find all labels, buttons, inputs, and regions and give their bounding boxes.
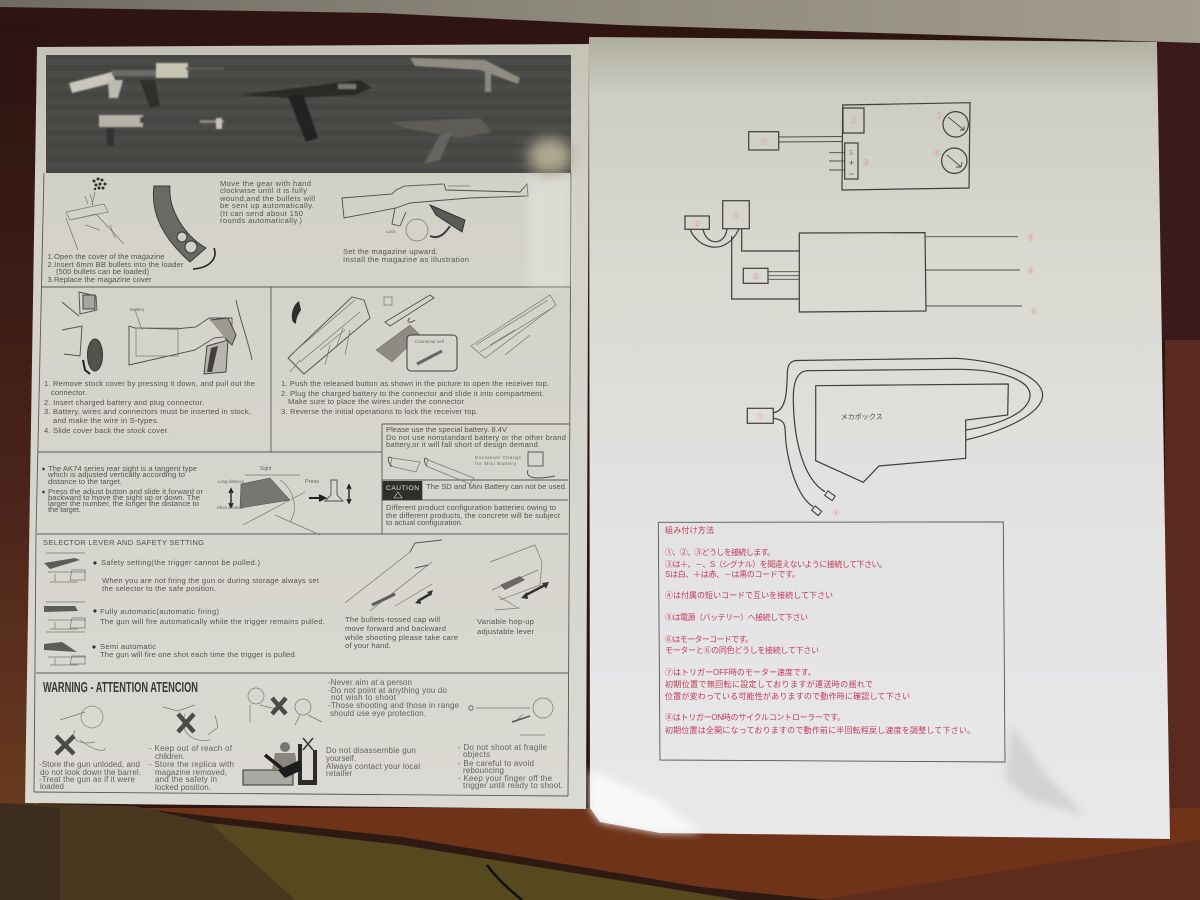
- panel: battery notice: [382, 425, 567, 527]
- diagram: wiring to motor: ⑤: [732, 212, 740, 220]
- panel: magazine loading: [48, 178, 528, 284]
- diagram: controller board: ③: [862, 159, 870, 167]
- text: sight instructions: distance to the target.: [48, 477, 122, 486]
- text: never aim: [328, 678, 460, 718]
- text: hop-up lever: adjustable lever: [477, 627, 534, 636]
- diagram: wiring to motor: ⑥: [1030, 308, 1038, 316]
- diagram: controller board: S: [849, 150, 854, 157]
- caution label: CAUTION: [386, 485, 419, 492]
- panel: stock battery: [44, 292, 255, 435]
- text: charger caption: [475, 455, 521, 467]
- panel: warning: [39, 678, 563, 792]
- text: sight instructions: larger the number, the longer the distance to: [48, 499, 199, 508]
- text: magazine steps: [48, 252, 184, 284]
- text: sight instructions: [42, 464, 203, 514]
- text: do not disassemble: yourself.: [326, 754, 356, 763]
- text: cap warning: of your hand.: [345, 641, 391, 650]
- diagram: wiring to motor: ③: [752, 273, 760, 281]
- panel frame lines: [34, 173, 571, 796]
- text: cap warning: [344, 615, 458, 650]
- diagram: wiring to motor: ⑥: [1028, 267, 1034, 275]
- text: caution message: The SD and Mini Battery can not be used.: [426, 482, 567, 491]
- text: item 6: [665, 635, 819, 655]
- heading: assembly method: 組み付け方法: [665, 525, 714, 535]
- diagram: controller board: ①: [760, 138, 767, 146]
- text: never aim: not wish to shoot: [331, 693, 397, 702]
- text: never aim: -Never aim at a person: [328, 678, 412, 687]
- text: safety setting: [93, 558, 320, 593]
- text: item 4: ④は付属の短いコードで互いを接続して下さい: [665, 590, 833, 600]
- text: keep out of reach: children.: [155, 752, 185, 761]
- diagram: controller board: ②: [850, 117, 857, 125]
- text: sight instructions: backward to move the sight up or down. The: [48, 493, 200, 502]
- panel: assembly instructions: [658, 522, 1005, 762]
- icon: person aiming at fragile object: [469, 698, 553, 735]
- text: receiver steps: [281, 379, 549, 416]
- text: safety setting: When you are not firing the gun or during storage always set: [102, 576, 320, 585]
- text: store unloaded: loaded: [40, 782, 64, 791]
- text: keep out of reach: - Keep out of reach of: [149, 744, 233, 753]
- text: magazine steps: 3.Replace the magazine cover: [48, 275, 152, 284]
- illustration: bullets-tossed cap: [345, 540, 442, 611]
- text: gear instruction: clockwise until it is fully: [220, 186, 307, 195]
- text: fully automatic: The gun will fire automatically while the trigger remains pulled.: [100, 617, 325, 626]
- diagram: controller board: +: [849, 158, 854, 168]
- illustration: rear sight: Short distance: [217, 505, 244, 510]
- text: item 8: ⑧はトリガーON時のサイクルコントローラーです。: [665, 712, 845, 722]
- text: sight instructions: The AK74 series rear sight is a tangent type: [48, 464, 197, 473]
- text: charger caption: Exclusive Charge: [475, 455, 521, 461]
- text: keep out of reach: magazine removed,: [155, 768, 227, 777]
- text: do not disassemble: Do not disassemble gun: [326, 746, 416, 755]
- text: battery steps: 2. Insert charged battery and plug connector.: [44, 398, 204, 407]
- illustration: battery in stock: [62, 292, 252, 374]
- text: battery steps: 4. Slide cover back the stock cover.: [44, 426, 169, 435]
- icon: child with replica: [163, 705, 218, 741]
- text: magazine steps: 2.Insert 6mm BB bullets into the loader: [48, 260, 184, 269]
- illustration: rifle with magazine: Lock: [386, 229, 396, 234]
- text: keep out of reach: locked position.: [155, 783, 211, 792]
- text: battery steps: 3. Battery, wires and connectors must be inserted in stock,: [44, 407, 251, 416]
- diagram: controller board: ⑧: [934, 149, 940, 157]
- text: fragile objects: - Do not shoot at fragile: [458, 743, 548, 752]
- text: cap warning: while shooting please take care: [344, 633, 458, 642]
- icon: two figures, do not aim: [248, 688, 322, 725]
- text: receiver steps: 1. Push the released button as shown in the picture to open the receiver top.: [281, 379, 549, 388]
- diagram: wiring to motor: ②: [694, 220, 700, 228]
- text: cap warning: move forward and backward: [345, 624, 446, 633]
- text: battery steps: connector.: [51, 388, 87, 397]
- panel: left sheet, gun manual: [25, 44, 589, 809]
- text: battery warning: battery,or it will fall short of design demand.: [386, 440, 540, 449]
- text: do not disassemble: retailer: [326, 769, 352, 778]
- text: fully automatic: [93, 607, 325, 626]
- text: magazine steps: 1.Open the cover of the magazine: [48, 252, 164, 261]
- caution label: [382, 481, 422, 500]
- text: item 6: モーターと⑥の同色どうしを接続して下さい: [665, 645, 819, 655]
- text: safety setting: the selector to the safe position.: [102, 584, 216, 593]
- illustration: rear sight: Press: [305, 479, 319, 485]
- text: item 7: ⑦はトリガーOFF時のモーター速度です。: [665, 667, 816, 677]
- text: item 7: 位置が変わっている可能性がありますので動作時に確認して下さい: [665, 691, 910, 701]
- text: gear instruction: Move the gear with hand: [220, 179, 311, 188]
- illustration: rear sight: Long distance: [218, 479, 245, 484]
- icon: do not disassemble: [243, 738, 317, 785]
- icon: safety position: [44, 553, 86, 582]
- text: magazine installation: Set the magazine upward.: [343, 247, 438, 256]
- illustration: rear sight: [217, 466, 351, 535]
- heading: warning: WARNING - ATTENTION ATENCION: [43, 679, 198, 696]
- text: semi automatic: The gun will fire one shot each time the trigger is pulled.: [100, 650, 297, 659]
- text: connector instructions: [665, 547, 887, 579]
- panel: rear sight: [42, 464, 351, 535]
- glare on left sheet: [528, 138, 572, 286]
- icons: batteries and charger: [388, 452, 555, 484]
- diagram: mechbox wire routing: ①: [756, 413, 764, 421]
- text: store unloaded: do not look down the barrel.: [40, 768, 141, 777]
- text: connector instructions: Sは白、＋は赤、－は黒のコードです。: [665, 569, 800, 579]
- panel: right sheet, wiring diagrams: [589, 37, 1170, 839]
- text: sight instructions: the target.: [48, 505, 81, 514]
- text: sight instructions: Press the adjust button and slide it forward or: [48, 487, 203, 496]
- text: item 8: [665, 712, 975, 735]
- text: semi automatic: Semi automatic: [100, 642, 156, 651]
- callout: connector detail: Connector cell: [415, 339, 444, 344]
- diagram: controller board: [749, 103, 970, 190]
- diagram: mechbox wire routing: ④: [832, 509, 840, 517]
- text: hop-up lever: [477, 617, 534, 636]
- text: semi automatic: [92, 642, 297, 659]
- panel: receiver battery: [281, 295, 556, 416]
- text: battery warning: Do not use nonstandard battery or the other brand: [386, 433, 566, 442]
- text: connector instructions: ①、②、③どうしを接続します。: [665, 547, 775, 557]
- text: keep out of reach: - Store the replica with: [149, 760, 234, 769]
- diagram: controller board: −: [849, 169, 854, 179]
- text: fragile objects: [458, 743, 563, 790]
- icon: semi auto position: [44, 632, 86, 665]
- illustration: rifle with magazine: [342, 184, 528, 241]
- text: item 6: ⑥はモーターコードです。: [665, 635, 753, 644]
- illustration: battery in stock: Battery: [130, 307, 145, 312]
- text: charger caption: for Mini Battery: [475, 461, 517, 467]
- diagram: mechbox wire routing: [747, 358, 1043, 517]
- text: item 5: ⑤は電源（バッテリー）へ接続して下さい: [665, 612, 808, 622]
- icon: BB bullets: [92, 178, 106, 190]
- text: item 7: 初期位置で無回転に設定しておりますが運送時の揺れで: [665, 679, 873, 689]
- diagram: controller board: ⑦: [936, 112, 942, 120]
- text: battery steps: and make the wire in S-types.: [53, 416, 159, 425]
- label: mechbox: メカボックス: [841, 413, 883, 421]
- text: configuration note: to actual configuration.: [386, 518, 463, 527]
- text: never aim: -Those shooting and those in range: [328, 701, 460, 710]
- text: battery warning: [386, 425, 566, 449]
- text: configuration note: [386, 503, 561, 527]
- text: magazine installation: [343, 247, 469, 264]
- text: receiver steps: 2. Plug the charged battery to the connector and slide it into compartment.: [281, 389, 544, 398]
- icon: full auto position: [44, 602, 86, 629]
- illustration: open receiver: [288, 297, 370, 374]
- text: never aim: should use eye protection.: [330, 709, 426, 718]
- text: configuration note: Different product configuration batteries owing to: [386, 503, 556, 512]
- icon: open magazine: [66, 192, 124, 250]
- text: sight instructions: which is adjusted vertically according to: [47, 470, 185, 479]
- illustration: closed receiver: [471, 295, 556, 358]
- text: receiver steps: 3. Reverse the initial operations to lock the receiver top.: [281, 407, 478, 416]
- text: configuration note: the different products, the concrete will be subject: [386, 511, 561, 520]
- icon: looking down barrel: [56, 706, 105, 754]
- text: connector instructions: ③は＋、－、S（シグナル）を間違えないように接続して下さい。: [665, 559, 887, 569]
- text: store unloaded: [39, 760, 141, 791]
- text: keep out of reach: and the safety in: [155, 775, 217, 784]
- text: fully automatic: Fully automatic(automatic firing): [100, 607, 219, 616]
- text: store unloaded: -Treat the gun as if it were: [39, 775, 136, 784]
- text: gear instruction: (It can send about 150: [220, 209, 303, 218]
- illustration: hop-up lever: [490, 545, 549, 610]
- text: fragile objects: trigger until ready to shoot.: [463, 781, 563, 790]
- text: fragile objects: - Keep your finger off the: [458, 774, 553, 783]
- text: item 7: [665, 667, 910, 701]
- heading: selector lever: SELECTOR LEVER AND SAFETY SETTING: [43, 538, 204, 547]
- text: magazine installation: Install the magazine as illustration: [343, 255, 469, 264]
- text: store unloaded: -Store the gun unloded, and: [39, 760, 140, 769]
- illustration: rear sight: Sight: [260, 466, 272, 472]
- text: battery warning: Please use the special battery. 8.4V: [386, 425, 508, 434]
- diagram: wiring to motor: ⑥: [1028, 234, 1034, 242]
- text: battery steps: [44, 379, 255, 435]
- text: gear instruction: be sent up automatically.: [220, 201, 314, 210]
- text: keep out of reach: [149, 744, 234, 792]
- text: gear instruction: [219, 179, 315, 225]
- text: do not disassemble: Always contact your local: [326, 762, 420, 771]
- diagram: wiring to motor: [685, 201, 1038, 316]
- text: item 8: 初期位置は全開になっておりますので動作前に半回転程戻し速度を調整して下さい。: [665, 725, 975, 735]
- text: fragile objects: objects: [463, 750, 490, 759]
- text: do not disassemble: [326, 746, 420, 778]
- text: fragile objects: - Be careful to avoid: [458, 759, 534, 768]
- icon: magazine with bullets: [153, 186, 215, 269]
- text: safety setting: Safety setting(the trigger cannot be pulled.): [101, 558, 260, 567]
- text: battery steps: 1. Remove stock cover by pressing it down, and pull out the: [44, 379, 255, 388]
- panel: selector lever and safety setting: [43, 538, 549, 665]
- text: cap warning: The bullets-tossed cap will: [345, 615, 440, 624]
- text: never aim: -Do not point at anything you do: [328, 686, 448, 695]
- photo banner of guns: [46, 55, 571, 173]
- text: fragile objects: rebouncing: [463, 766, 504, 775]
- text: receiver steps: Make sure to place the wires under the connector: [288, 397, 464, 406]
- text: gear instruction: wound,and the bullets will: [219, 194, 315, 203]
- text: hop-up lever: Variable hop-up: [477, 617, 534, 626]
- text: magazine steps: (500 bullets can be loaded): [56, 267, 149, 276]
- illustration: battery compartment: [376, 295, 457, 371]
- text: gear instruction: rounds automatically.): [220, 216, 302, 225]
